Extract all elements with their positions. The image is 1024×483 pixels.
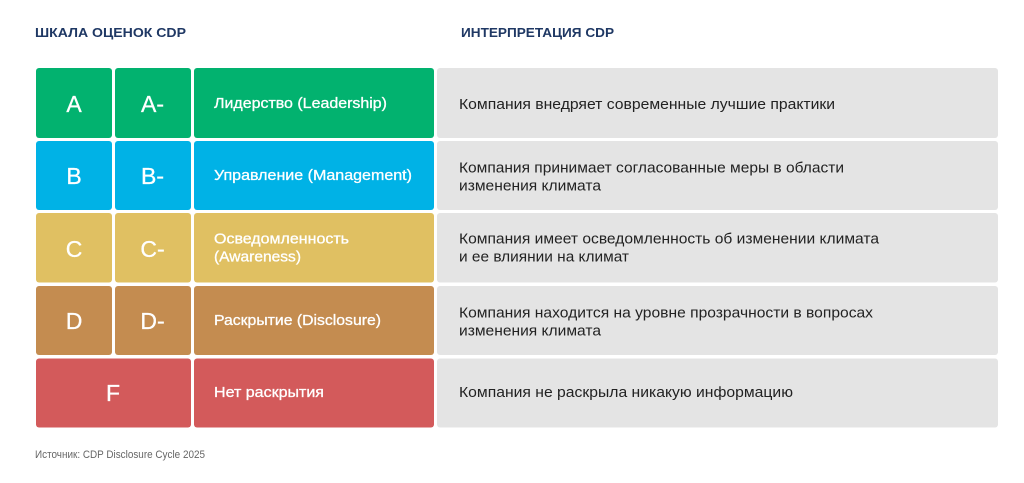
grade B- bbox=[115, 141, 191, 210]
grade D: D bbox=[66, 308, 82, 334]
interpretation: disclosure: изменения климата bbox=[459, 323, 602, 340]
row: F no disclosure bbox=[36, 358, 998, 428]
row: C awareness bbox=[36, 213, 998, 282]
level: leadership bbox=[194, 68, 434, 138]
level: no disclosure bbox=[194, 358, 434, 428]
grade C-: C- bbox=[140, 236, 165, 262]
grade D-: D- bbox=[140, 308, 165, 334]
interpretation: no disclosure: Компания не раскрыла никакую информацию bbox=[459, 384, 793, 401]
interpretation: management bbox=[437, 141, 998, 210]
interpretation: leadership bbox=[437, 68, 998, 138]
interpretation: awareness: Компания имеет осведомленность об изменении климата bbox=[459, 230, 880, 248]
level: awareness: Осведомленность bbox=[214, 230, 349, 248]
grade A- bbox=[115, 68, 191, 138]
level: awareness bbox=[194, 213, 434, 282]
row: D disclosure bbox=[36, 286, 998, 355]
interpretation: awareness bbox=[437, 213, 998, 282]
level: management: Управление (Management) bbox=[214, 167, 412, 184]
grade C bbox=[36, 213, 112, 282]
interpretation: no disclosure bbox=[437, 358, 998, 428]
row: A leadership bbox=[36, 68, 998, 138]
interpretation: management: Компания принимает согласованные меры в области bbox=[459, 160, 844, 176]
grade F bbox=[36, 358, 191, 428]
grade B-: B- bbox=[141, 163, 164, 189]
grade C- bbox=[115, 213, 191, 282]
interpretation: disclosure bbox=[437, 286, 998, 355]
grade A bbox=[36, 68, 112, 138]
grade D bbox=[36, 286, 112, 355]
interpretation: leadership: Компания внедряет современные лучшие практики bbox=[459, 96, 835, 113]
interpretation: disclosure: Компания находится на уровне прозрачности в вопросах bbox=[459, 305, 874, 322]
level: disclosure: Раскрытие (Disclosure) bbox=[214, 312, 381, 329]
grade D- bbox=[115, 286, 191, 355]
grade F: F bbox=[106, 380, 120, 406]
interpretation: awareness: и ее влиянии на климат bbox=[459, 249, 629, 266]
grade A: A bbox=[66, 91, 82, 117]
row: B management bbox=[36, 141, 998, 210]
level: no disclosure: Нет раскрытия bbox=[214, 384, 324, 401]
interpretation: management: изменения климата bbox=[459, 178, 602, 194]
grade A-: A- bbox=[141, 91, 164, 117]
heading: interpretation: ИНТЕРПРЕТАЦИЯ CDP bbox=[461, 25, 614, 40]
level: leadership: Лидерство (Leadership) bbox=[214, 95, 387, 112]
heading: rating scale: ШКАЛА ОЦЕНОК CDP bbox=[35, 25, 186, 40]
grade B bbox=[36, 141, 112, 210]
level: awareness: (Awareness) bbox=[214, 248, 301, 266]
source note: Источник: CDP Disclosure Cycle 2025 bbox=[35, 449, 205, 461]
grade C: C bbox=[66, 236, 82, 262]
grade B: B bbox=[66, 163, 82, 189]
level: disclosure bbox=[194, 286, 434, 355]
level: management bbox=[194, 141, 434, 210]
